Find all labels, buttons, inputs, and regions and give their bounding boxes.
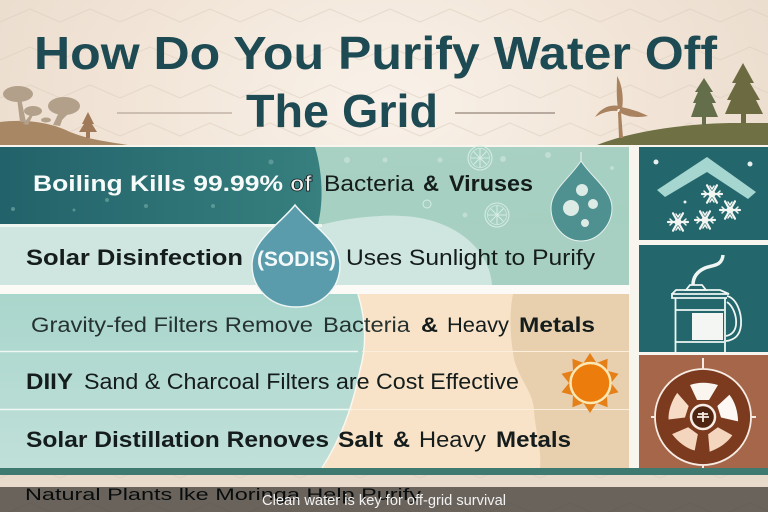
panel: lower filter rows background [0, 294, 629, 468]
text: solar distillation row: Metals [496, 427, 571, 452]
text: boiling row: & [423, 171, 439, 196]
icon: sun [562, 353, 618, 413]
text: solar distillation row: & [393, 427, 410, 452]
panel: solar disinfection row background [0, 216, 630, 294]
title: The Grid [246, 85, 438, 137]
text: solar distillation row: Heavy [419, 427, 486, 452]
text: solar distillation row: Salt [338, 427, 384, 452]
bottom divider strip [0, 468, 768, 475]
text: boiling row: of [290, 171, 313, 196]
icon: large drop holding SODIS: (SODIS) [257, 248, 336, 271]
text: solar distillation row: Solar Distillation Renoves [26, 427, 329, 452]
landscape: right hill, wind turbine and pine trees [595, 63, 768, 145]
text: solar distillation row [26, 427, 571, 452]
text: boiling row: Viruses [449, 171, 533, 196]
text: solar disinfection row [26, 245, 595, 270]
text: boiling row: Bacteria [324, 171, 415, 196]
panel: boiling row background [0, 147, 629, 224]
title: How Do You Purify Water Off [34, 27, 718, 79]
text: solar disinfection row: Solar Disinfection [26, 245, 243, 270]
caption bar: Clean water is key for off-grid survival [262, 493, 506, 509]
text: gravity filters row: Bacteria [323, 313, 410, 337]
icon: large drop holding SODIS [252, 205, 340, 307]
landscape: left hill with trees [0, 86, 128, 145]
caption bar [0, 487, 768, 512]
panel: snow and roof icon [639, 147, 768, 240]
text: gravity filters row: & [421, 313, 438, 337]
text: gravity filters row: Heavy [447, 313, 509, 337]
text: boiling row: Boiling Kills 99.99% [33, 171, 283, 196]
text: gravity filters row: Metals [519, 313, 595, 337]
icon: water drop with dots [551, 152, 612, 241]
text: natural plants row: Natural Plants lke Moringa Help Purify [25, 485, 422, 504]
text: gravity filters row: Gravity-fed Filters Remove [31, 313, 313, 337]
white backing behind panels [0, 145, 768, 468]
text: DIY filters row: DIIY [26, 369, 73, 394]
icon: citrus decorations [423, 146, 509, 227]
text: gravity filters row [31, 313, 595, 337]
title [34, 27, 718, 137]
panel: fan wheel icon [639, 355, 768, 472]
text: DIY filters row: Sand & Charcoal Filters are Cost Effective [84, 369, 519, 394]
panel: water filter pitcher icon [639, 245, 768, 357]
text: solar disinfection row: Uses Sunlight to Purify [346, 245, 595, 270]
text: boiling row [33, 171, 533, 196]
